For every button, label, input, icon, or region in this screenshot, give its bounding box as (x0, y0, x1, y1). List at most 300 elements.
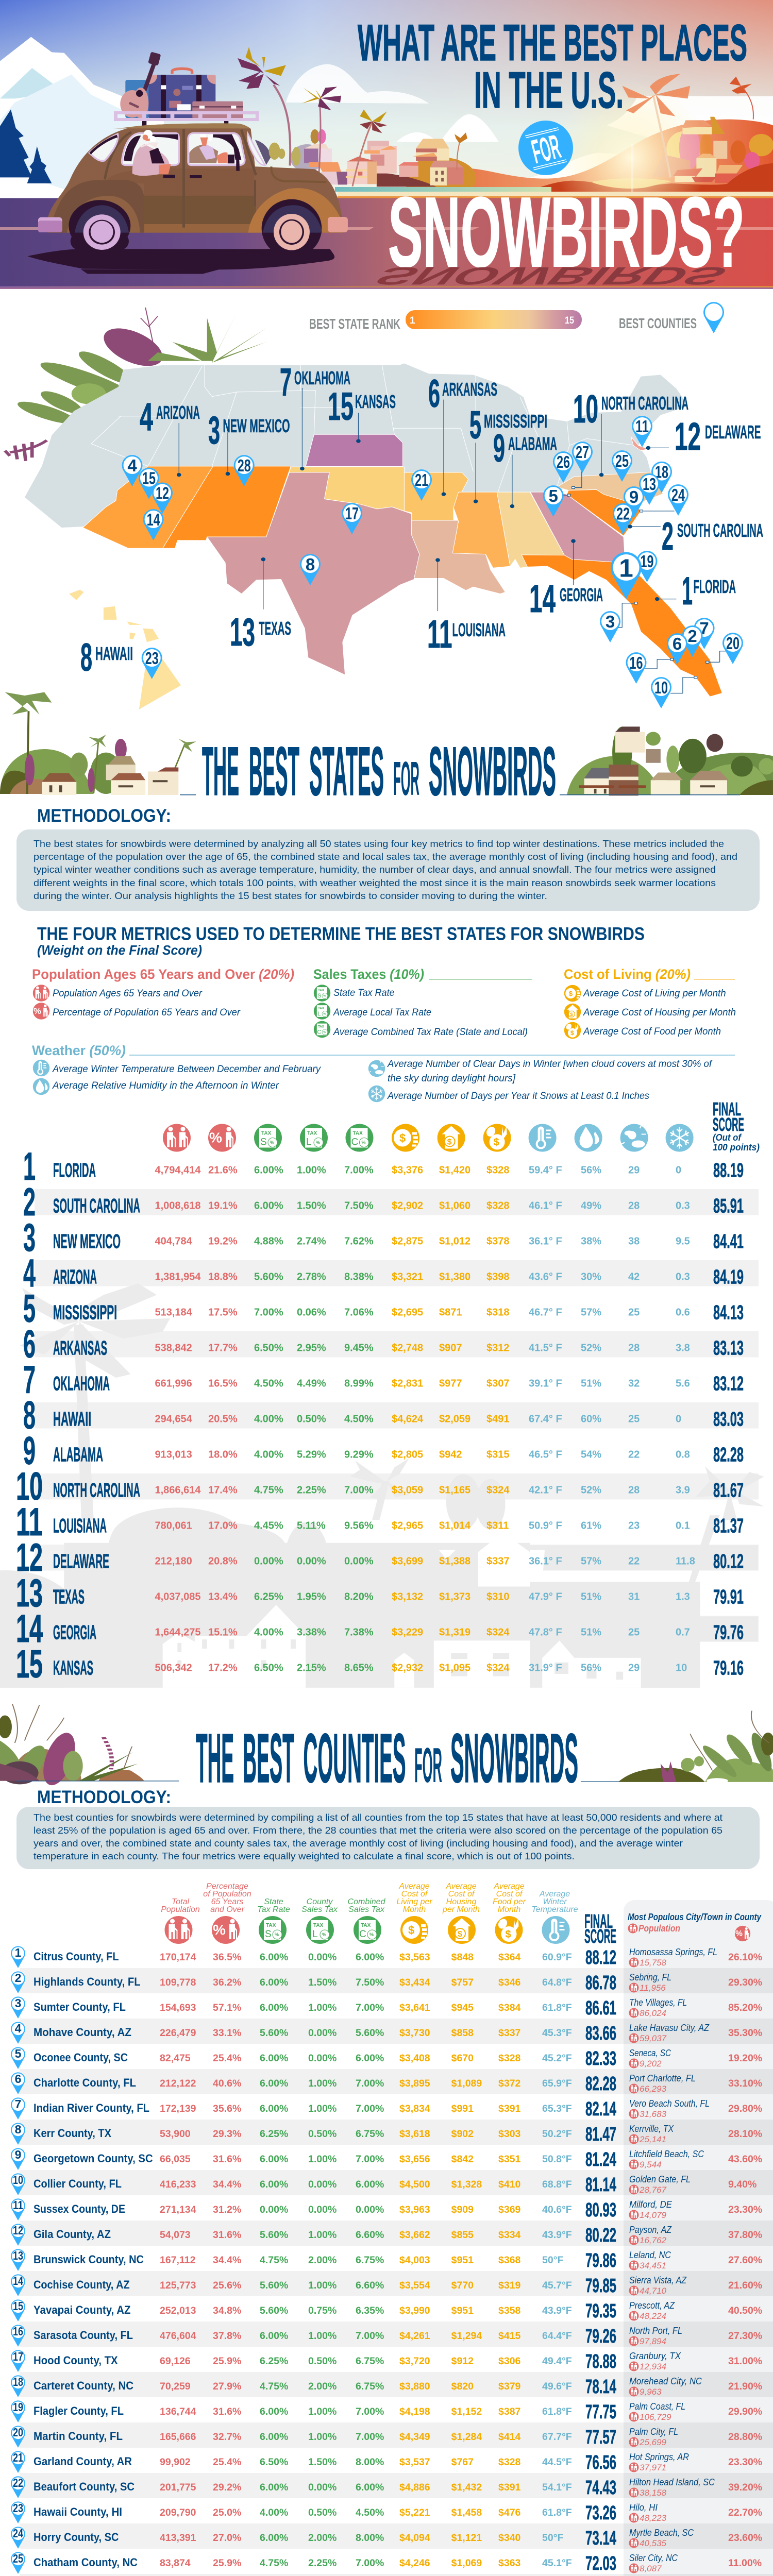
row: 11 Sussex County (11, 2198, 762, 2221)
row: 24 Horry County: 50°F (542, 2532, 563, 2544)
row: 7 Indian River County: 7 (15, 2097, 21, 2111)
watermark palms and houses behind state table (0, 1283, 764, 1688)
row: 9 Georgetown County: $842 (451, 2154, 474, 2165)
row: 20 Martin County: 28.80% (728, 2431, 762, 2443)
row: 18 Carteret County: 78.14 (585, 2376, 616, 2398)
metric group: weather: Weather (50%) (32, 1043, 126, 1058)
row: 2 South Carolina: 1,008,618 (155, 1200, 200, 1212)
row: 9 Alabama: 54% (581, 1449, 601, 1460)
row: 14 Cochise County: 79.85 (585, 2275, 616, 2297)
row: 7 Indian River County: Indian River County, FL (33, 2102, 149, 2114)
row: 5 Mississippi: 25 (628, 1307, 640, 1318)
row: 4 Mohave County: $858 (451, 2027, 474, 2039)
row: 24 Horry County: 23.60% (728, 2532, 762, 2544)
label: 15 Kansas: 15 (328, 385, 354, 429)
row: 6 Arkansas: 17.7% (208, 1343, 238, 1354)
row: 25 Chatham County: 7.00% (356, 2557, 384, 2569)
label: 11 Louisiana: LOUISIANA (452, 619, 506, 640)
row: 5 Mississippi: 46.7° F (529, 1307, 562, 1318)
row: 10 North Carolina: $3,059 (392, 1485, 423, 1496)
row: 14 Georgia: 79.76 (713, 1622, 744, 1643)
row: 10 Collier County: Golden Gate, FL (629, 2174, 691, 2184)
row: 7 Oklahoma: 4.49% (297, 1378, 326, 1389)
row: 20 Martin County: Palm City, FL (629, 2426, 678, 2437)
label: 15 Kansas: KANSAS (355, 391, 396, 412)
metric group: cost of living: Cost of Living (20%) (564, 967, 691, 982)
row: 17 Hood County (11, 2350, 762, 2372)
row: 8 Hawaii: 0.50% (297, 1414, 326, 1425)
metric group: sales taxes: Sales Taxes (10%) (313, 967, 424, 982)
row: 3 Sumter County: $384 (498, 2002, 521, 2013)
row: 4 Mohave County: 35.30% (728, 2027, 762, 2039)
label: 12 Delaware (675, 415, 761, 459)
row: 9 Georgetown County: 9,544 (640, 2160, 662, 2170)
metric group: sales taxes: State Tax Rate (333, 988, 395, 998)
row: 2 South Carolina: 6.00% (254, 1200, 283, 1212)
row: 4 Mohave County: 0.00% (308, 2027, 337, 2039)
label: 13 Texas: TEXAS (259, 618, 291, 639)
row: 12 Delaware: DELAWARE (53, 1551, 109, 1572)
row: 17 Hood County: 12,934 (640, 2362, 666, 2371)
row: 7 Indian River County: 65.3°F (542, 2103, 572, 2114)
methodology text panel: states: different weights in the final score, which totals 100 points, with weather weighted the most since it is the main reason snowbirds seek warmer locations (33, 877, 716, 888)
row: 7 Indian River County (11, 2097, 762, 2120)
row: 6 Charlotte County: 40.6% (213, 2078, 241, 2089)
row: 23 Hawaii County: 22.70% (728, 2507, 762, 2518)
map legend: best state rank: 15 (565, 315, 574, 326)
heading: four metrics: THE FOUR METRICS USED TO DETERMINE THE BEST STATES FOR SNOWBIRDS (37, 923, 645, 944)
row: 5 Mississippi: 7.06% (344, 1307, 374, 1318)
row: 20 Martin County: 165,666 (160, 2431, 196, 2443)
row: 14 Cochise County: Sierra Vista, AZ (629, 2275, 687, 2285)
row: 14 Georgia: 7.38% (344, 1627, 374, 1638)
row: 18 Carteret County: $820 (451, 2381, 474, 2392)
row: 7 Oklahoma: 83.12 (713, 1372, 744, 1395)
row: 12 Delaware (16, 1536, 744, 1580)
row: 21 Garland County: $3,537 (399, 2456, 430, 2468)
methodology text panel: states: percentage of the population over the age of 65, the combined state and local sales tax, the average monthly cost of living (including housing and food), and (33, 851, 737, 862)
row: 12 Delaware: 0.00% (344, 1556, 374, 1567)
row: 11 Louisiana: 0.1 (676, 1520, 690, 1531)
row: 8 Hawaii: $491 (486, 1414, 509, 1425)
row: 1 Citrus County: $3,563 (399, 1952, 430, 1963)
row: 12 Gila County: 6.60% (356, 2229, 384, 2241)
row: 7 Indian River County: 6.00% (260, 2103, 288, 2114)
row: 12 Delaware: $3,699 (392, 1556, 423, 1567)
row: 11 Louisiana: 5.11% (297, 1520, 326, 1531)
row: 16 Sarasota County: 37.8% (213, 2330, 241, 2342)
row: 5 Oconee County: $3,408 (399, 2053, 430, 2064)
row: 9 Georgetown County (11, 2148, 762, 2171)
row: 23 Hawaii County: $476 (498, 2507, 521, 2518)
county table column headers: Sales Tax (348, 1905, 385, 1914)
county pins on map: 9 (629, 487, 638, 506)
row: 23 Hawaii County: Hilo, HI (629, 2502, 658, 2513)
row: 21 Garland County (11, 2451, 762, 2473)
row: 15 Yavapai County: $3,990 (399, 2305, 430, 2316)
row: 8 Kerr County: 28.10% (728, 2128, 762, 2140)
row: 6 Arkansas: 6 (23, 1323, 36, 1366)
row: 20 Martin County: $1,284 (451, 2431, 482, 2443)
row: 21 Garland County: 1.50% (308, 2456, 337, 2468)
plants right of counties title (581, 1711, 773, 1784)
row: 7 Oklahoma: 16.5% (208, 1378, 238, 1389)
row: 13 Brunswick County: Brunswick County, NC (33, 2253, 144, 2266)
row: 2 Highlands County: Sebring, FL (629, 1972, 671, 1982)
row: 20 Martin County: $414 (498, 2431, 521, 2443)
row: 7 Indian River County: Vero Beach South, FL (629, 2098, 710, 2109)
row: 14 Cochise County: 5.60% (260, 2280, 288, 2291)
row: 9 Alabama: 22 (628, 1449, 640, 1460)
row: 11 Louisiana: 61% (581, 1520, 601, 1531)
label: 11 Louisiana: 11 (427, 613, 452, 656)
row: 2 South Carolina: 0.3 (676, 1200, 690, 1212)
row: 3 New Mexico: $1,012 (439, 1235, 470, 1247)
label: 11 Louisiana (427, 613, 506, 656)
section title: the best states for snowbirds: STATES (309, 733, 384, 810)
row: 7 Indian River County: $991 (451, 2103, 474, 2114)
metric group: cost of living: Average Cost of Food per Month (583, 1026, 721, 1037)
row: 14 Georgia: 51% (581, 1627, 601, 1638)
row: 4 Mohave County: 4 (15, 2022, 22, 2035)
row: 10 North Carolina (16, 1465, 744, 1509)
row: 25 Chatham County: 8,087 (640, 2564, 662, 2573)
row: 20 Martin County: 32.7% (213, 2431, 241, 2443)
row: 4 Arizona: 5.60% (254, 1272, 283, 1283)
row: 13 Brunswick County: 6.75% (356, 2255, 384, 2266)
row: 20 Martin County: 25,699 (639, 2437, 667, 2447)
row: 6 Arkansas: ARKANSAS (53, 1337, 107, 1359)
hero illustration banner (0, 0, 773, 289)
hero title: what are the best places in the U.S.: IN THE U.S. (474, 61, 624, 118)
county table column headers (161, 1882, 578, 1914)
row: 19 Flagler County: 31.6% (213, 2406, 241, 2417)
row: 14 Georgia: GEORGIA (53, 1622, 96, 1643)
row: 16 Sarasota County: Sarasota County, FL (33, 2329, 133, 2342)
village illustration right of states title (567, 726, 773, 795)
final score column header: FINAL (713, 1098, 741, 1120)
row: 22 Beaufort County: 29.2% (213, 2482, 241, 2493)
row: 10 Collier County: 6.00% (260, 2179, 288, 2190)
county table right panel (624, 1900, 773, 2576)
row: 13 Brunswick County: 27.60% (728, 2255, 762, 2266)
county ranking table (11, 1946, 762, 2576)
county pins on map: 6 (673, 634, 682, 653)
row: 7 Indian River County: 35.6% (213, 2103, 241, 2114)
row: 15 Kansas: $1,095 (439, 1662, 470, 1673)
row: 12 Delaware: 12 (16, 1536, 43, 1580)
state: New Mexico (163, 466, 291, 548)
label: 14 Georgia: 14 (529, 577, 556, 621)
row: 21 Garland County: 8.00% (356, 2456, 384, 2468)
row: 11 Louisiana: 11 (16, 1500, 43, 1544)
row: 4 Arizona: $398 (486, 1272, 509, 1283)
row: 10 North Carolina: $1,165 (439, 1485, 470, 1496)
row: 1 Florida: 7.00% (344, 1164, 374, 1176)
row: 6 Charlotte County: 65.9°F (542, 2078, 572, 2089)
row: 5 Oconee County: 9,202 (640, 2059, 662, 2069)
row: 3 New Mexico: 3 (23, 1216, 36, 1260)
row: 12 Gila County: Gila County, AZ (33, 2228, 111, 2241)
row: 2 South Carolina: 7.50% (344, 1200, 374, 1212)
label: 5 Mississippi: MISSISSIPPI (484, 411, 547, 432)
row: 22 Beaufort County (11, 2476, 762, 2499)
row: 8 Hawaii: 20.5% (208, 1414, 238, 1425)
row: 13 Texas: 47.9° F (529, 1591, 562, 1602)
row: 13 Brunswick County: 50°F (542, 2255, 563, 2266)
row: 16 Sarasota County: 6.00% (260, 2330, 288, 2342)
row: 18 Carteret County: $379 (498, 2381, 521, 2392)
row: 4 Arizona: ARIZONA (53, 1266, 97, 1288)
row: 3 Sumter County: 1.00% (308, 2002, 337, 2013)
map legend: best state rank: BEST STATE RANK (309, 316, 400, 332)
row: 15 Kansas: KANSAS (53, 1657, 93, 1680)
state: Arkansas (404, 472, 468, 520)
map: United States by state rank (25, 363, 730, 709)
label: 12 Delaware: 12 (675, 415, 701, 459)
row: 23 Hawaii County: 209,790 (160, 2507, 196, 2518)
row: 11 Sussex County: 23.30% (728, 2204, 762, 2215)
state: Hawaii (69, 590, 181, 709)
county pins on map: 22 (616, 504, 630, 523)
row: 1 Florida: 0 (676, 1164, 681, 1176)
row: 7 Oklahoma: 4.50% (254, 1378, 283, 1389)
state: Louisiana (412, 520, 506, 594)
row: 5 Oconee County: $670 (451, 2053, 474, 2064)
row: 22 Beaufort County: 201,775 (160, 2482, 196, 2493)
metric group: population (32, 967, 294, 1020)
row: 5 Mississippi: MISSISSIPPI (53, 1301, 117, 1324)
row: 7 Indian River County: 7.00% (356, 2103, 384, 2114)
row: 22 Beaufort County: Hilton Head Island, SC (629, 2477, 715, 2487)
row: 4 Arizona: $1,380 (439, 1272, 470, 1283)
state: Oklahoma (290, 467, 404, 511)
row: 3 New Mexico: 38 (628, 1235, 640, 1247)
metric group: weather: Average Number of Clear Days in Winter [when cloud covers at most 30% of (387, 1059, 713, 1070)
section title: the best counties for snowbirds: COUNTIES (303, 1719, 406, 1797)
row: 1 Florida: 6.00% (254, 1164, 283, 1176)
row: 2 South Carolina: $2,902 (392, 1200, 423, 1212)
row: 6 Charlotte County: $372 (498, 2078, 521, 2089)
row: 13 Brunswick County (11, 2249, 762, 2272)
row: 2 Highlands County: 64.8°F (542, 1977, 572, 1988)
row: 4 Arizona: $3,321 (392, 1272, 423, 1283)
row: 24 Horry County: 27.0% (213, 2532, 241, 2544)
county table column headers: Cost of (448, 1890, 475, 1899)
row: 5 Mississippi: $871 (439, 1307, 462, 1318)
row: 14 Cochise County: $3,554 (399, 2280, 430, 2291)
section title: the best counties for snowbirds: BEST (243, 1719, 294, 1797)
row: 15 Kansas: 2.15% (297, 1662, 326, 1673)
row: 16 Sarasota County: $1,294 (451, 2330, 482, 2342)
row: 21 Garland County: Garland County, AR (33, 2455, 132, 2468)
row: 6 Arkansas: 52% (581, 1343, 601, 1354)
county table column headers: Month (498, 1905, 520, 1914)
row: 12 Gila County: 31.6% (213, 2229, 241, 2241)
row: 21 Garland County: 23.30% (728, 2456, 762, 2468)
row: 6 Charlotte County: $3,895 (399, 2078, 430, 2089)
row: 3 Sumter County (11, 1996, 762, 2019)
row: 13 Texas (16, 1571, 744, 1615)
row: 3 New Mexico: 9.5 (676, 1235, 690, 1247)
row: 25 Chatham County: Chatham County, NC (33, 2556, 138, 2569)
county table column headers: Percentage (206, 1882, 248, 1891)
row: 2 Highlands County: $757 (451, 1977, 474, 1988)
row: 13 Texas: $310 (486, 1591, 509, 1602)
label: 8 Hawaii: 8 (80, 636, 92, 680)
row: 13 Brunswick County: 13 (13, 2249, 23, 2262)
row: 4 Mohave County: 226,479 (160, 2027, 196, 2039)
row: 13 Brunswick County: $368 (498, 2255, 521, 2266)
row: 10 North Carolina: 81.67 (713, 1480, 744, 1501)
row: 7 Indian River County: 31,683 (640, 2109, 667, 2119)
row: 1 Florida: $328 (486, 1164, 509, 1176)
row: 14 Cochise County: Cochise County, AZ (33, 2278, 130, 2291)
row: 5 Oconee County: 45.2°F (542, 2053, 572, 2064)
row: 15 Kansas: 8.65% (344, 1662, 374, 1673)
row: 4 Arizona: 8.38% (344, 1272, 374, 1283)
row: 1 Citrus County: 170,174 (160, 1952, 196, 1963)
county table column headers: Cost of (401, 1890, 428, 1899)
county pins on map: 1 (619, 554, 633, 582)
metric group: population: Population Ages 65 Years and Over (53, 988, 203, 999)
row: 4 Arizona: 2.78% (297, 1272, 326, 1283)
row: 12 Gila County: $3,662 (399, 2229, 430, 2241)
county pins on map: 11 (635, 417, 649, 436)
row: 5 Mississippi: 0.6 (676, 1307, 690, 1318)
county table column headers: per Month (442, 1905, 480, 1914)
row: 6 Charlotte County: 6.00% (260, 2078, 288, 2089)
row: 25 Chatham County: 83,874 (160, 2557, 191, 2569)
row: 10 Collier County: 34.4% (213, 2179, 241, 2190)
row: 11 Louisiana: $2,965 (392, 1520, 423, 1531)
row: 8 Hawaii: 0 (676, 1414, 681, 1425)
county pins on map: 10 (654, 678, 668, 697)
map legend: best state rank: 1 (410, 315, 415, 326)
row: 10 Collier County: Collier County, FL (33, 2177, 122, 2190)
county pins on map: 13 (643, 474, 656, 494)
row: 25 Chatham County: $4,246 (399, 2557, 430, 2569)
label: 6 Arkansas (428, 372, 497, 416)
row: 17 Hood County: $306 (498, 2355, 521, 2367)
row: 8 Hawaii: 83.03 (713, 1409, 744, 1430)
row: 23 Hawaii County: 61.8°F (542, 2507, 572, 2518)
row: 17 Hood County: 78.88 (585, 2351, 616, 2372)
row: 25 Chatham County: Siler City, NC (629, 2552, 678, 2563)
row: 15 Kansas: $2,932 (392, 1662, 423, 1673)
row: 13 Texas: 1.3 (676, 1591, 690, 1602)
row: 15 Kansas: 10 (676, 1662, 687, 1673)
section title: the best states for snowbirds: FOR (393, 752, 419, 805)
row: 6 Charlotte County: 212,122 (160, 2078, 196, 2089)
row: 4 Mohave County (11, 2022, 762, 2044)
metric group: weather: the sky during daylight hours] (388, 1073, 516, 1084)
row: 14 Georgia (16, 1607, 744, 1651)
row: 3 Sumter County: $945 (451, 2002, 474, 2013)
row: 15 Yavapai County: 40.50% (728, 2305, 762, 2316)
county table column headers: Cost of (496, 1890, 523, 1899)
row: 19 Flagler County (11, 2400, 762, 2423)
row: 3 Sumter County: 61.8°F (542, 2002, 572, 2013)
county table column headers: Average (493, 1882, 525, 1891)
row: 15 Yavapai County: 15 (13, 2299, 23, 2313)
row: 14 Georgia: $1,319 (439, 1627, 470, 1638)
row: 14 Georgia: $3,229 (392, 1627, 423, 1638)
row: 1 Citrus County: Homosassa Springs, FL (629, 1946, 717, 1957)
state labels on map: GEORGIA (560, 584, 603, 605)
row: 11 Sussex County: 0.00% (260, 2204, 288, 2215)
row: 14 Cochise County: 21.60% (728, 2280, 762, 2291)
row: 20 Martin County: 20 (13, 2426, 23, 2439)
label: 3 New Mexico: NEW MEXICO (223, 415, 290, 436)
row: 16 Sarasota County: 64.4°F (542, 2330, 572, 2342)
county table column headers: Sales Tax (301, 1905, 338, 1914)
row: 9 Georgetown County: 31.6% (213, 2154, 241, 2165)
row: 9 Alabama: 913,013 (155, 1449, 192, 1460)
row: 8 Kerr County: 6.75% (356, 2128, 384, 2140)
county table column headers: Average (445, 1882, 477, 1891)
row: 9 Alabama: ALABAMA (53, 1444, 103, 1466)
row: 4 Arizona: 1,381,954 (155, 1272, 201, 1283)
county pins on map: 17 (345, 504, 359, 523)
row: 14 Cochise County: $319 (498, 2280, 521, 2291)
row: 15 Yavapai County: 34.8% (213, 2305, 241, 2316)
row: 5 Mississippi (23, 1287, 744, 1331)
row: 10 North Carolina: 3.9 (676, 1485, 690, 1496)
row: 11 Sussex County: 0.00% (356, 2204, 384, 2215)
row: 15 Yavapai County: 5.60% (260, 2305, 288, 2316)
row: 5 Oconee County: 6.00% (356, 2053, 384, 2064)
section title: the best states for snowbirds: THE (202, 733, 239, 810)
row: 8 Kerr County: $902 (451, 2128, 474, 2140)
row: 15 Yavapai County: 79.35 (585, 2300, 616, 2322)
row: 19 Flagler County: $1,152 (451, 2406, 482, 2417)
row: 18 Carteret County: 9,963 (640, 2387, 662, 2397)
row: 15 Kansas: 506,342 (155, 1662, 192, 1673)
row: 15 Kansas: 17.2% (208, 1662, 238, 1673)
county table column headers: Tax Rate (257, 1905, 290, 1914)
row: 5 Mississippi: 84.13 (713, 1301, 744, 1324)
row: 21 Garland County: 6.50% (260, 2456, 288, 2468)
county pins on map: 26 (557, 452, 570, 471)
row: 3 New Mexico: 2.74% (297, 1235, 326, 1247)
row: 16 Sarasota County: 16 (13, 2325, 23, 2338)
map legend: best counties: BEST COUNTIES (619, 315, 697, 331)
row: 21 Garland County: $767 (451, 2456, 474, 2468)
row: 11 Louisiana: 780,061 (155, 1520, 192, 1531)
row: 9 Alabama: 46.5° F (529, 1449, 562, 1460)
row: 4 Arizona: 18.8% (208, 1272, 238, 1283)
label: 3 New Mexico: 3 (208, 409, 220, 452)
row: 1 Citrus County: 88.12 (585, 1947, 616, 1969)
row: 22 Beaufort County: 0.00% (308, 2482, 337, 2493)
row: 14 Cochise County: 25.6% (213, 2280, 241, 2291)
row: 1 Florida: 21.6% (208, 1164, 238, 1176)
row: 15 Yavapai County: 6.35% (356, 2305, 384, 2316)
row: 16 Sarasota County: 7.00% (356, 2330, 384, 2342)
row: 17 Hood County: 31.00% (728, 2355, 762, 2367)
row: 17 Hood County: 49.4°F (542, 2355, 572, 2367)
row: 2 South Carolina: $328 (486, 1200, 509, 1212)
row: 21 Garland County: 21 (13, 2451, 23, 2464)
row: 10 Collier County: 81.14 (585, 2174, 616, 2196)
row: 4 Arizona (23, 1251, 744, 1295)
county pins on map: 5 (549, 486, 558, 505)
row: 23 Hawaii County: 23 (13, 2501, 23, 2515)
row: 19 Flagler County: 29.90% (728, 2406, 762, 2417)
row: 13 Texas: 31 (628, 1591, 640, 1602)
row: 7 Oklahoma: $977 (439, 1378, 462, 1389)
